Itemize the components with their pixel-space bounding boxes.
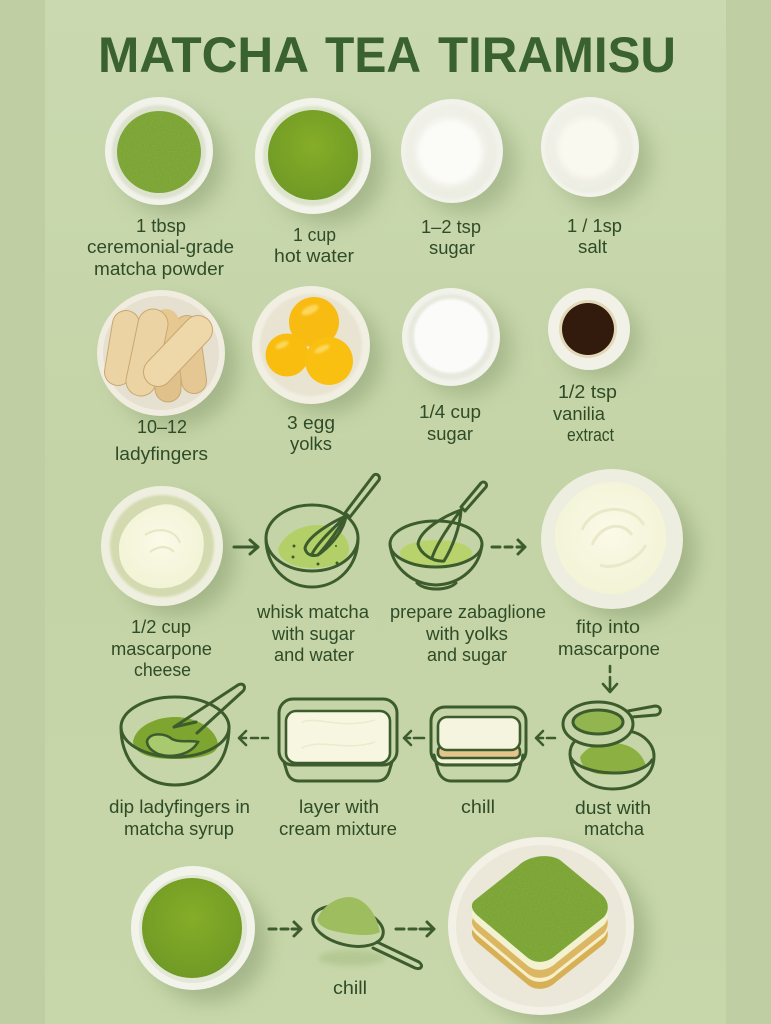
ingredient: matcha powder bbox=[87, 97, 234, 279]
step: layer with cream mixture bbox=[279, 699, 397, 839]
ingredient: mascarpone: cheese bbox=[134, 660, 191, 680]
title: TIRAMISU bbox=[438, 27, 676, 83]
ingredient: sugar quarter cup: sugar bbox=[427, 424, 473, 444]
title: TEA bbox=[325, 27, 421, 83]
step: whisk matcha bbox=[256, 474, 379, 665]
step: prepare zabaglione: and sugar bbox=[427, 645, 507, 665]
ingredient: egg yolks bbox=[252, 286, 382, 454]
arrow bbox=[234, 540, 258, 554]
ingredient: vanilla extract: vanilia bbox=[553, 404, 606, 424]
ingredient: sugar small: sugar bbox=[429, 238, 475, 258]
ingredient: hot water bbox=[255, 98, 384, 266]
step: dust with matcha: matcha bbox=[584, 819, 645, 839]
ingredient: vanilla extract: 1/2 tsp bbox=[558, 382, 617, 402]
ingredient: matcha powder: ceremonial-grade bbox=[87, 237, 234, 257]
step: fold into mascarpone: fitρ into bbox=[576, 617, 640, 637]
step: prepare zabaglione: with yolks bbox=[425, 624, 508, 644]
ingredient: ladyfingers: ladyfingers bbox=[115, 444, 208, 464]
step: chill: chill bbox=[461, 797, 495, 817]
bowl: matcha syrup bbox=[131, 866, 268, 1002]
step: sieve with matcha: chill bbox=[333, 978, 367, 998]
step: whisk matcha: with sugar bbox=[271, 624, 355, 644]
step: whisk matcha: whisk matcha bbox=[256, 602, 370, 622]
arrow bbox=[239, 731, 268, 745]
step: layer with cream mixture: cream mixture bbox=[279, 819, 397, 839]
step: dip ladyfingers bbox=[109, 684, 250, 839]
ingredient: hot water: hot water bbox=[274, 246, 354, 266]
step: dust with matcha bbox=[563, 702, 660, 839]
ingredient: hot water: 1 cup bbox=[293, 225, 336, 245]
ingredient: ladyfingers bbox=[97, 290, 238, 464]
step: whisk matcha: and water bbox=[274, 645, 354, 665]
ingredient: salt bbox=[541, 97, 651, 257]
title: MATCHA bbox=[98, 27, 309, 83]
step: chill bbox=[431, 707, 526, 817]
arrow down bbox=[603, 666, 617, 692]
ingredient: salt: salt bbox=[578, 237, 607, 257]
step: dip ladyfingers: dip ladyfingers in bbox=[109, 797, 250, 817]
arrow bbox=[404, 731, 424, 745]
step: fold into mascarpone: mascarpone bbox=[558, 639, 660, 659]
ingredient: egg yolks: 3 egg bbox=[287, 413, 335, 433]
ingredient: matcha powder: 1 tbsp bbox=[136, 216, 186, 236]
finished tiramisu on plate bbox=[448, 837, 648, 1024]
ingredient: sugar small bbox=[401, 99, 516, 258]
ingredient: vanilla extract: extract bbox=[567, 425, 614, 445]
ingredient: mascarpone: 1/2 cup bbox=[131, 617, 191, 637]
ingredient: mascarpone: mascarpone bbox=[111, 639, 212, 659]
ingredient: vanilla extract bbox=[548, 288, 640, 445]
title bbox=[98, 27, 676, 83]
ingredient: ladyfingers: 10–12 bbox=[137, 417, 187, 437]
ingredient: egg yolks: yolks bbox=[290, 434, 332, 454]
ingredient: salt: 1 / 1sp bbox=[567, 216, 622, 236]
ingredient: sugar quarter cup: 1/4 cup bbox=[419, 402, 481, 422]
step: prepare zabaglione: prepare zabaglione bbox=[390, 602, 546, 622]
arrow bbox=[492, 540, 525, 554]
step: dust with matcha: dust with bbox=[575, 798, 651, 818]
ingredient: sugar small: 1–2 tsp bbox=[421, 217, 481, 237]
step: fold into mascarpone bbox=[541, 469, 696, 659]
arrow bbox=[536, 731, 555, 745]
step: dip ladyfingers: matcha syrup bbox=[124, 819, 234, 839]
step: layer with cream mixture: layer with bbox=[299, 797, 379, 817]
step: sieve with matcha bbox=[308, 897, 422, 998]
ingredient: mascarpone bbox=[101, 486, 235, 680]
ingredient: sugar quarter cup bbox=[402, 288, 512, 444]
arrow bbox=[269, 922, 301, 936]
step: prepare zabaglione bbox=[390, 482, 546, 665]
ingredient: matcha powder: matcha powder bbox=[94, 259, 224, 279]
arrow bbox=[396, 922, 434, 936]
